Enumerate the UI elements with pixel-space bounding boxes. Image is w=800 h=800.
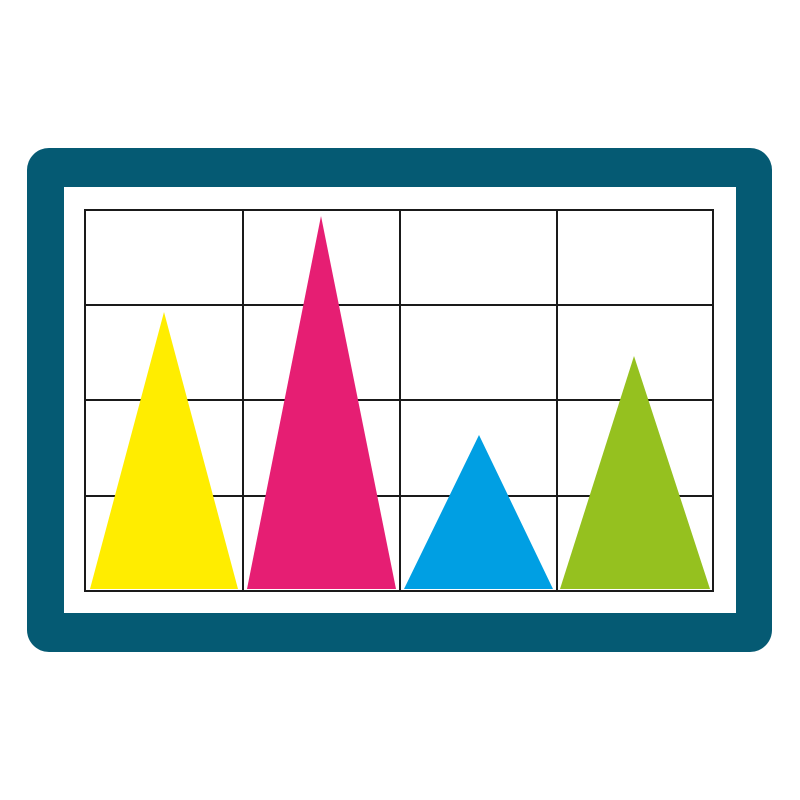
triangle: blue: [404, 435, 553, 589]
triangle: magenta: [247, 216, 396, 589]
grid: [85, 210, 713, 591]
triangle: yellow: [90, 312, 238, 589]
frame: teal tablet border: [27, 148, 772, 652]
triangle: green: [560, 356, 710, 589]
panel: white screen: [64, 187, 736, 613]
